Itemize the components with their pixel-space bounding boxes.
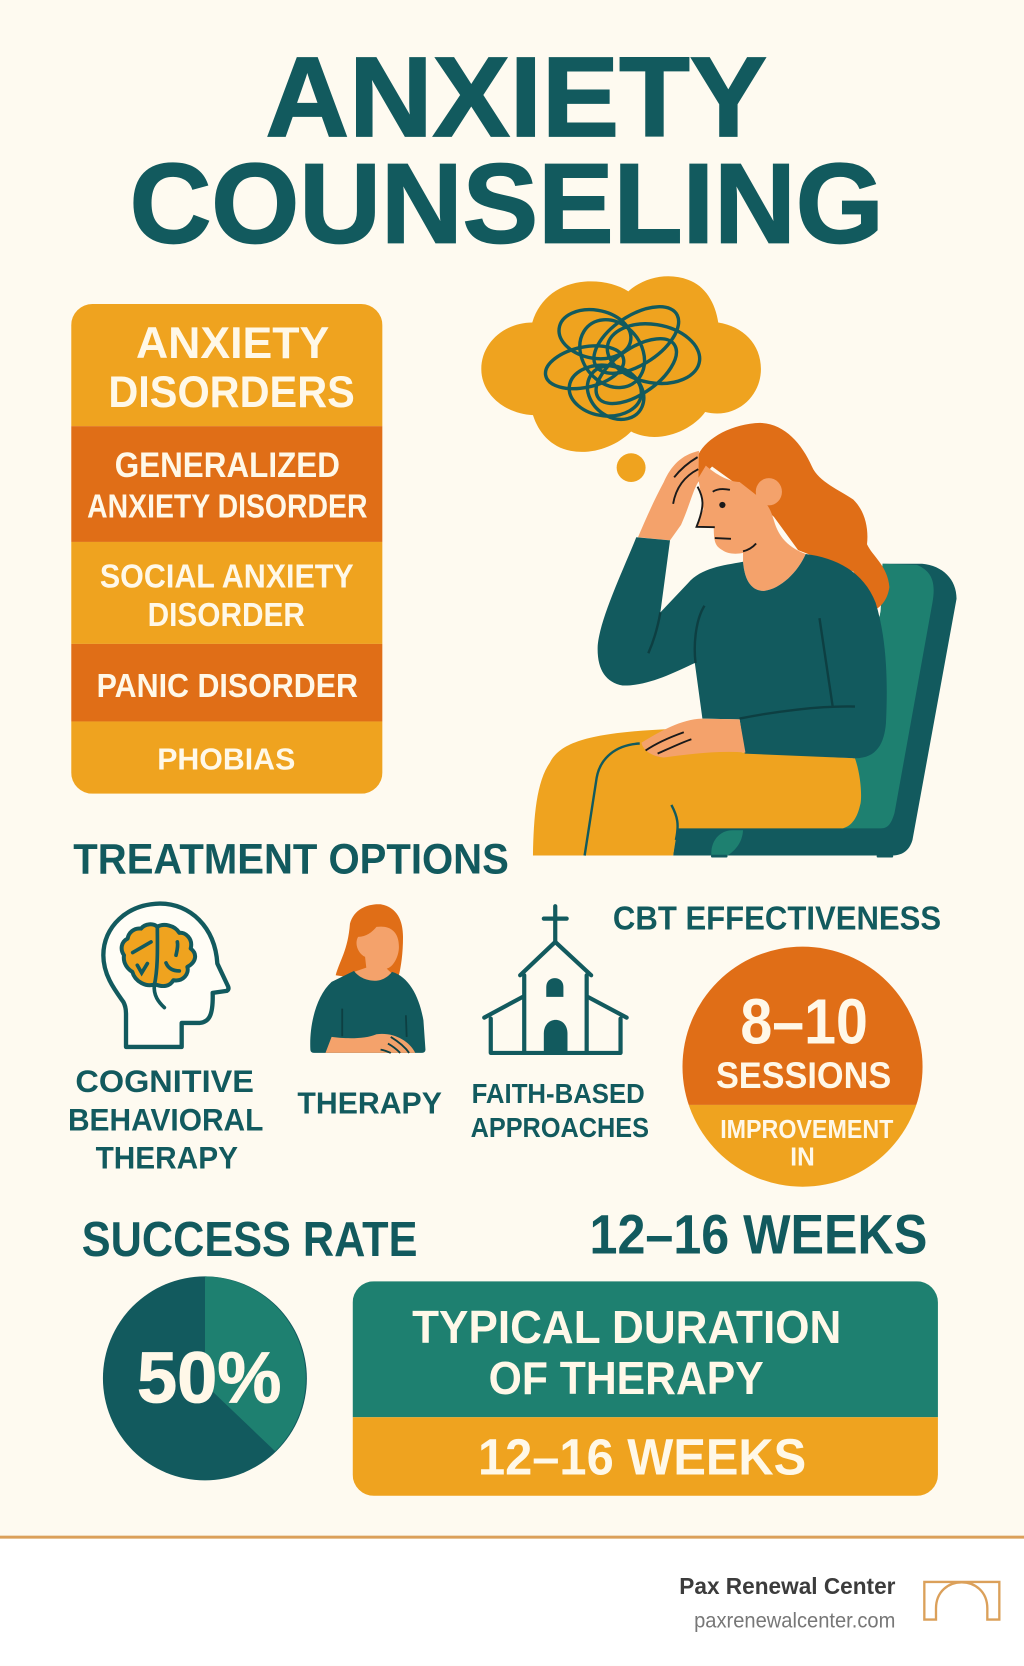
circle: cbt sessions: IMPROVEMENT [720,1116,894,1144]
panel: anxiety disorders [71,304,382,794]
heading: cbt effectiveness: CBT EFFECTIVENESS [613,900,941,937]
title: ANXIETY [266,34,767,161]
legs [533,729,861,856]
heading: 12-16 weeks: 12–16 WEEKS [590,1204,927,1266]
thought bubble [481,276,761,482]
label: cognitive behavioral therapy: THERAPY [96,1140,238,1176]
label: cognitive behavioral therapy: COGNITIVE [75,1063,254,1099]
brand url: paxrenewalcenter.com [694,1609,895,1633]
panel: anxiety disorders: ANXIETY DISORDER [87,488,368,525]
panel: typical duration of therapy [353,1281,938,1496]
icon: head with brain [103,904,228,1047]
panel: anxiety disorders: GENERALIZED [115,446,340,485]
brand name: Pax Renewal Center [679,1573,896,1599]
label: cognitive behavioral therapy [68,1063,263,1176]
hand on knee [641,719,745,758]
treatment icons [310,904,627,1053]
panel: anxiety disorders: SOCIAL ANXIETY [100,558,354,595]
chair [673,564,957,858]
label: faith-based approaches: APPROACHES [471,1112,649,1143]
hair [698,423,889,608]
icon: therapy person [310,904,425,1053]
sweater [598,537,887,758]
label: faith-based approaches [471,1078,649,1143]
title: COUNSELING [130,140,884,267]
hand on head [638,451,699,540]
title [130,34,884,267]
panel: typical duration of therapy: OF THERAPY [489,1352,764,1404]
panel: anxiety disorders: ANXIETY [136,319,330,368]
circle: cbt sessions: 8–10 [740,985,868,1057]
panel: typical duration of therapy: TYPICAL DURATION [412,1301,841,1353]
label: therapy: THERAPY [297,1085,442,1120]
panel: typical duration of therapy: 12–16 WEEKS [478,1429,806,1486]
illustration: anxious woman with thought bubble [481,276,957,858]
heading: success rate: SUCCESS RATE [82,1213,417,1267]
icon: church [484,906,627,1053]
facial and hand lines [646,457,756,754]
label: cognitive behavioral therapy: BEHAVIORAL [68,1101,263,1137]
panel: anxiety disorders: PHOBIAS [157,741,295,776]
pie chart: 50% success rate: 50% [137,1338,281,1418]
face and neck [697,466,806,591]
icon: arch logo [924,1582,999,1620]
label: faith-based approaches: FAITH-BASED [472,1078,645,1109]
panel: anxiety disorders: DISORDER [148,596,305,633]
circle: cbt sessions: SESSIONS [716,1054,891,1096]
circle: cbt sessions [680,943,926,1190]
heading: treatment options: TREATMENT OPTIONS [73,836,509,883]
panel: anxiety disorders: DISORDERS [108,368,355,417]
circle: cbt sessions: IN [790,1143,815,1171]
pie chart: 50% success rate [103,1276,307,1480]
footer [0,1536,1024,1666]
panel: anxiety disorders: PANIC DISORDER [97,667,358,704]
